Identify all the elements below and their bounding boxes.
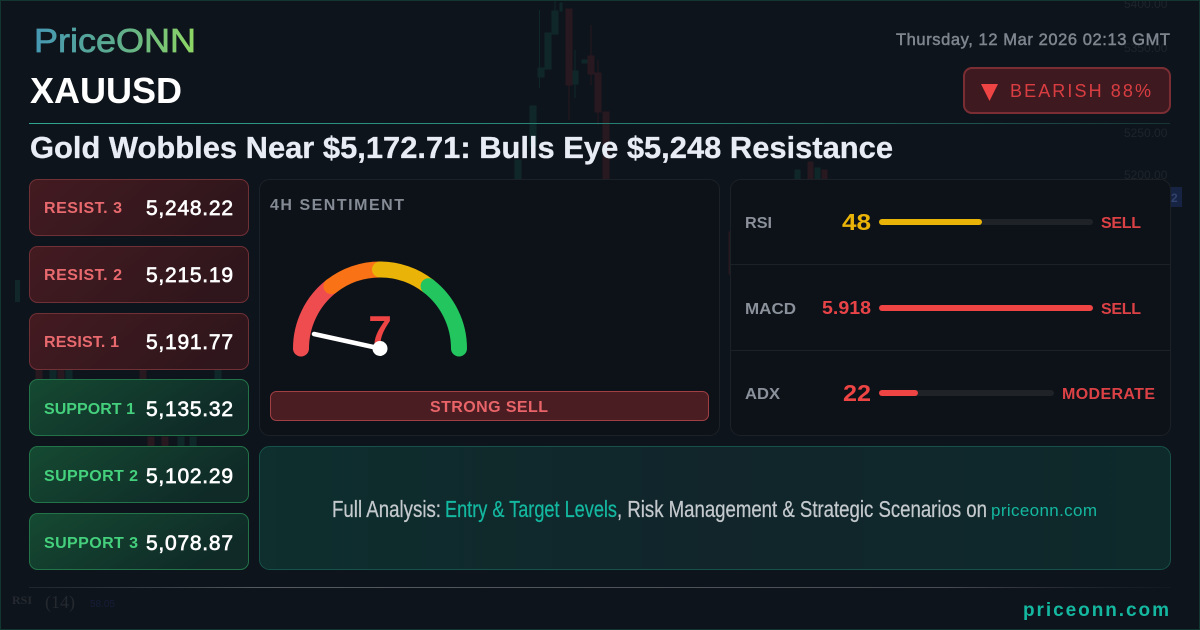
ADX row: 22 (843, 380, 871, 406)
ADX row: MODERATE (1062, 386, 1155, 403)
footer divider (29, 587, 1170, 588)
call to action text: , Risk Management & Strategic Scenarios on (617, 496, 987, 522)
header divider (29, 123, 1170, 124)
RSI row (745, 209, 1141, 235)
headline: Gold Wobbles Near $5,172.71: Bulls Eye $5,248 Resistance (30, 130, 893, 165)
badge label: BEARISH 88% (1010, 81, 1151, 101)
RSI row: 48 (842, 209, 871, 235)
MACD row: 5.918 (822, 298, 871, 318)
faint background chart: 5250.00 (1124, 126, 1168, 140)
faint background chart: 5350.00 (1124, 41, 1168, 55)
symbol: XAUUSD (30, 70, 182, 111)
resistance 3: RESIST. 3 (44, 200, 122, 217)
panel: indicators (730, 180, 1170, 436)
ADX row: ADX (745, 386, 780, 403)
MACD row: MACD (745, 301, 796, 318)
RSI row: SELL (1101, 215, 1141, 232)
resistance 2: 5,215.19 (146, 264, 233, 287)
resistance 1 (30, 314, 248, 370)
support 2: SUPPORT 2 (44, 468, 138, 485)
gauge (301, 270, 459, 356)
strong sell pill: STRONG SELL (430, 399, 548, 416)
support 1: 5,135.32 (146, 398, 233, 421)
faint background chart: RSI (12, 593, 32, 607)
support 3: 5,078.87 (146, 532, 233, 555)
resistance 1: 5,191.77 (146, 331, 233, 354)
MACD row (745, 298, 1141, 318)
resistance 3: 5,248.22 (146, 197, 233, 220)
faint background chart: 5200.00 (1124, 168, 1168, 182)
RSI row: RSI (745, 215, 772, 232)
support 2: 5,102.29 (146, 465, 233, 488)
icon: down triangle (981, 84, 998, 101)
MACD row: SELL (1101, 301, 1141, 318)
date and time: Thursday, 12 Mar 2026 02:13 GMT (896, 31, 1170, 49)
resistance 2 (30, 246, 248, 302)
faint background chart: (14) (45, 592, 75, 613)
support 2 (30, 446, 248, 502)
support 1: SUPPORT 1 (44, 401, 135, 418)
resistance 2: RESIST. 2 (44, 267, 122, 284)
footer website: priceonn.com (1023, 600, 1169, 621)
support 3 (30, 514, 248, 570)
call to action text (332, 496, 1097, 522)
call to action text: Entry & Target Levels (445, 496, 617, 522)
support 1 (30, 380, 248, 436)
bearish badge (964, 68, 1170, 113)
faint background chart: 2 (1171, 191, 1178, 205)
support 3: SUPPORT 3 (44, 535, 138, 552)
faint background chart: 5300.00 (1124, 86, 1168, 100)
panel: price levels (30, 180, 248, 570)
call to action text: Full Analysis: (332, 496, 441, 522)
resistance 3 (30, 180, 248, 236)
logo: PriceONN (34, 22, 196, 59)
needle (314, 334, 380, 348)
call to action text: priceonn.com (991, 501, 1097, 520)
gauge value: 7 (368, 307, 392, 354)
faint background chart: 58.05 (90, 599, 115, 610)
ADX row (745, 380, 1155, 406)
strong sell pill (270, 392, 708, 420)
resistance 1: RESIST. 1 (44, 334, 119, 351)
panel: call to action (260, 446, 1170, 570)
panel: 4H sentiment (260, 180, 720, 436)
sentiment heading: 4H SENTIMENT (270, 197, 404, 214)
